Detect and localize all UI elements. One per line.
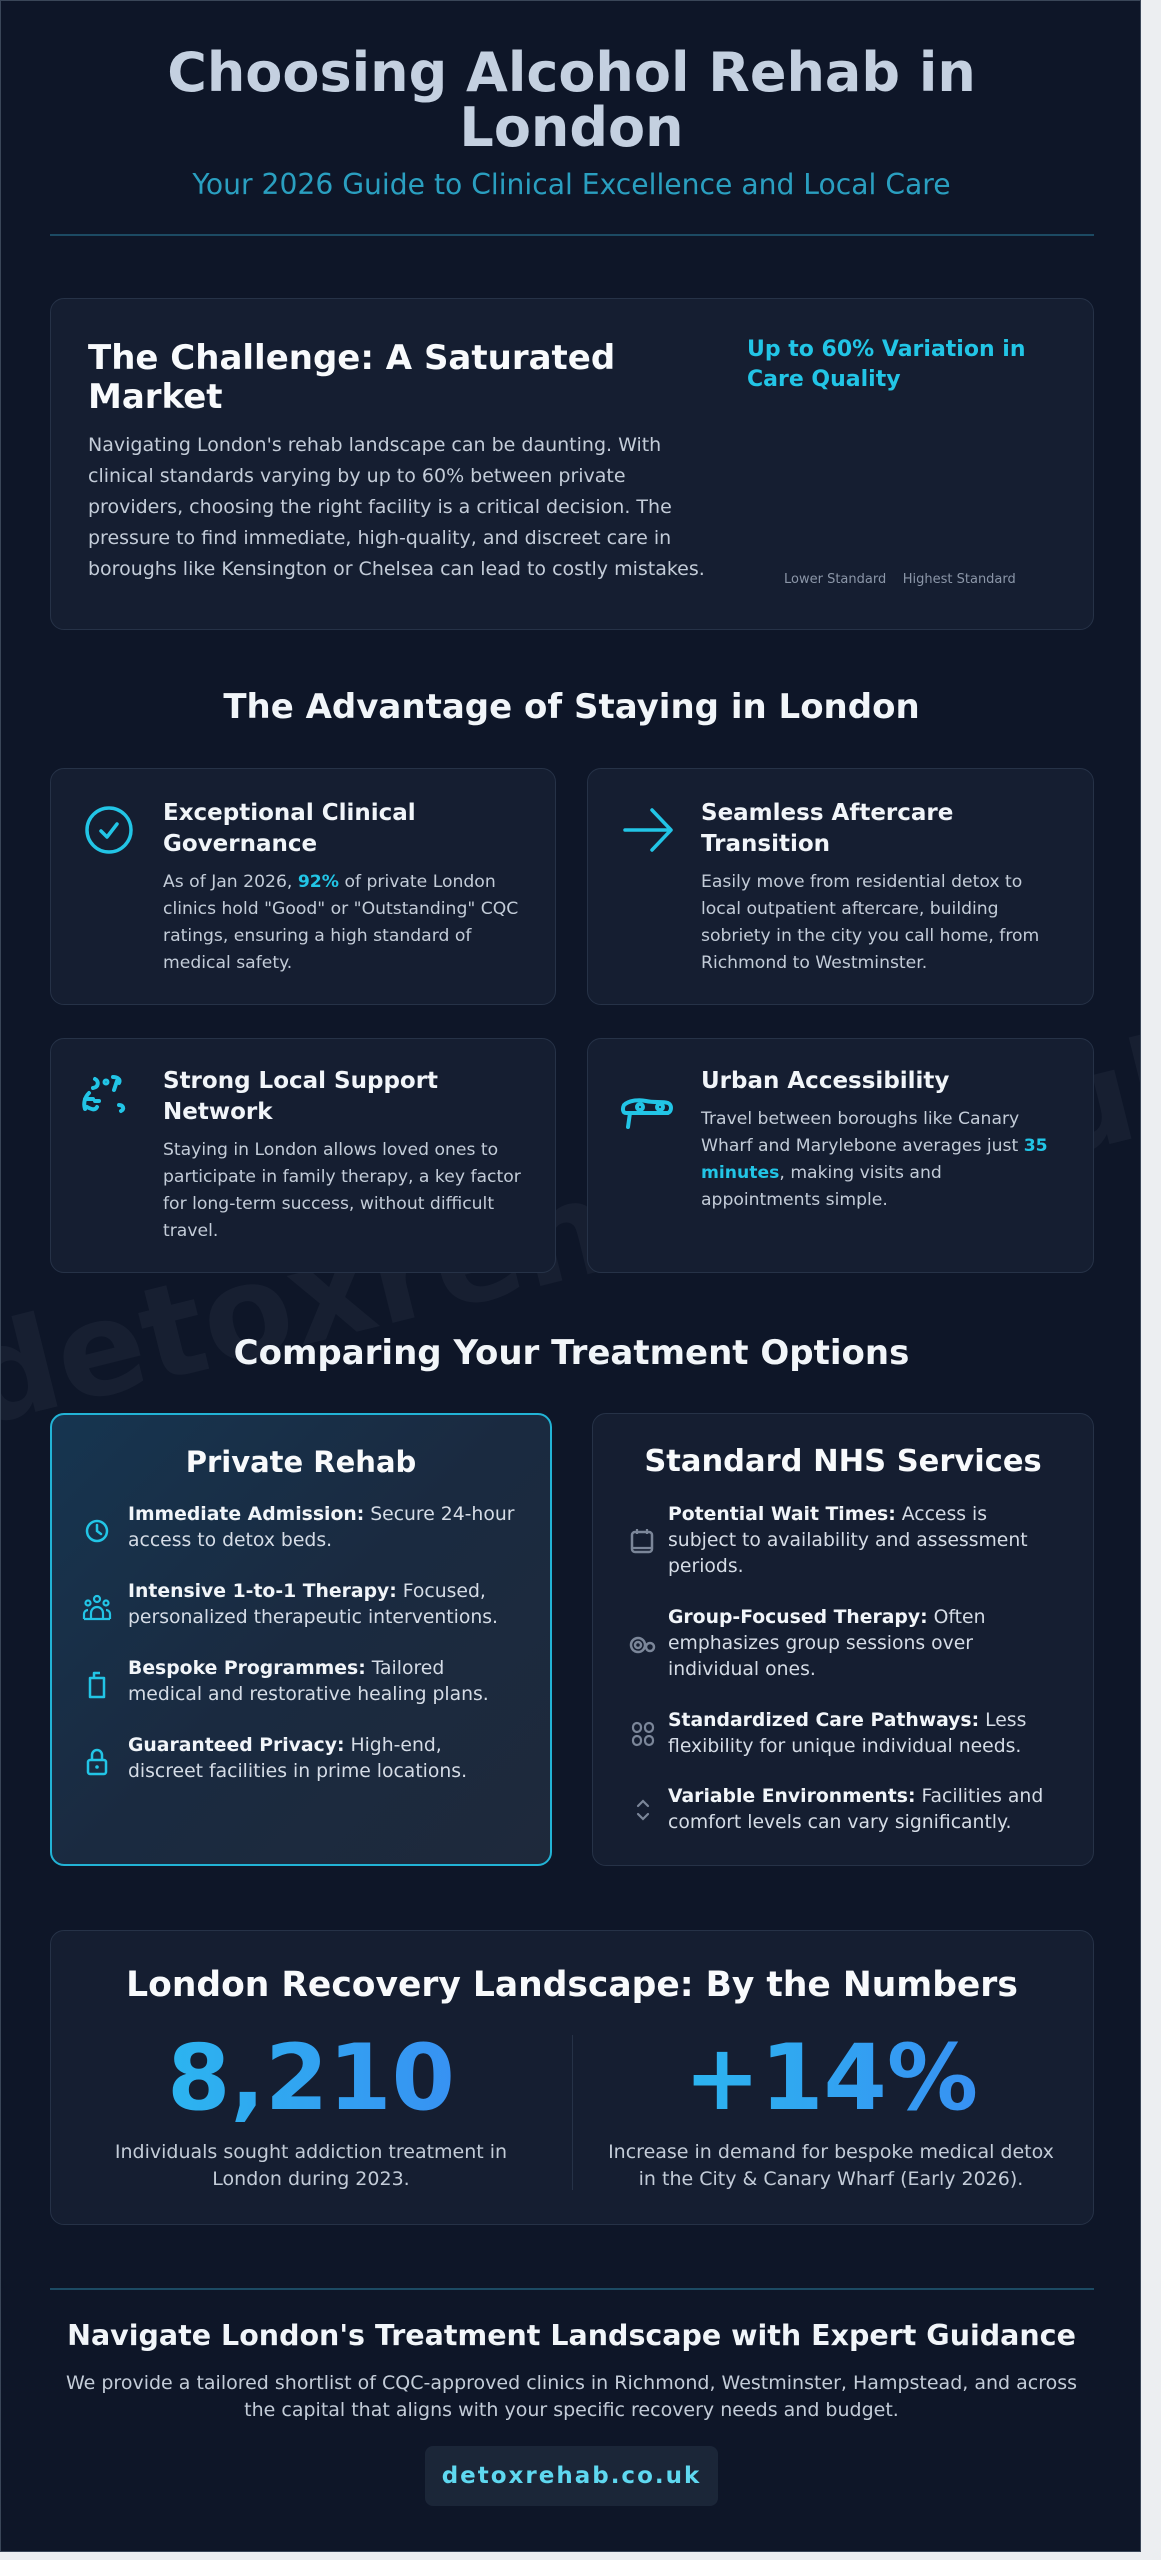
chart: care quality variation bbox=[747, 337, 1025, 587]
panel: challenge bbox=[50, 298, 1094, 630]
footer text bbox=[66, 2372, 1077, 2421]
item: therapy: Intensive 1-to-1 Therapy: Focused, bbox=[128, 1581, 486, 1602]
item: admission: access to detox beds. bbox=[128, 1530, 332, 1551]
challenge text: clinical standards varying by up to 60% between private bbox=[88, 465, 626, 487]
item: programmes: medical and restorative healing plans. bbox=[128, 1684, 489, 1705]
item: privacy: Guaranteed Privacy: High-end, bbox=[128, 1735, 442, 1756]
panel: support network: participate in family therapy, a key factor bbox=[163, 1167, 521, 1187]
item: programmes: Bespoke Programmes: Tailored bbox=[128, 1658, 444, 1679]
challenge text: pressure to find immediate, high-quality, and discreet care in bbox=[88, 527, 671, 549]
panel: aftercare: Richmond to Westminster. bbox=[701, 953, 927, 973]
stat: 8,210: London during 2023. bbox=[212, 2168, 410, 2190]
stat: +14%: in the City & Canary Wharf (Early 2026). bbox=[639, 2168, 1023, 2190]
subtitle: Your 2026 Guide to Clinical Excellence and Local Care bbox=[192, 168, 951, 201]
panel: aftercare: Transition bbox=[701, 831, 830, 857]
challenge heading: Market bbox=[88, 377, 223, 417]
footer text: the capital that aligns with your specific recovery needs and budget. bbox=[244, 2399, 899, 2421]
challenge text: providers, choosing the right facility is a critical decision. The bbox=[88, 496, 672, 518]
item: environments: comfort levels can vary significantly. bbox=[668, 1812, 1011, 1833]
challenge text: Navigating London's rehab landscape can be daunting. With bbox=[88, 434, 661, 456]
challenge heading: The Challenge: A Saturated bbox=[88, 338, 615, 378]
panel: clinical governance: Governance bbox=[163, 831, 317, 857]
stat: 8,210: 8,210 bbox=[167, 2026, 455, 2131]
item: wait times: periods. bbox=[668, 1556, 744, 1577]
button: website: detoxrehab.co.uk bbox=[442, 2463, 701, 2489]
panel: aftercare: local outpatient aftercare, building bbox=[701, 899, 999, 919]
panel: urban accessibility: Wharf and Marylebone averages just 35 bbox=[701, 1136, 1048, 1156]
panel: by the numbers bbox=[50, 1930, 1094, 2225]
button: website bbox=[425, 2446, 718, 2506]
stat: +14% bbox=[608, 2026, 1054, 2190]
panel: aftercare: Easily move from residential detox to bbox=[701, 872, 1022, 892]
item: programmes bbox=[88, 1658, 489, 1705]
panel: clinical governance: ratings, ensuring a high standard of bbox=[163, 926, 471, 946]
item: group therapy: individual ones. bbox=[668, 1659, 816, 1680]
footer text: We provide a tailored shortlist of CQC-approved clinics in Richmond, Westminster, Hampstead, and across bbox=[66, 2372, 1077, 2394]
icon: check circle bbox=[85, 806, 133, 854]
challenge text: boroughs like Kensington or Chelsea can lead to costly mistakes. bbox=[88, 558, 705, 580]
item: pathways: Standardized Care Pathways: Less bbox=[668, 1710, 1026, 1731]
heading: advantage: The Advantage of Staying in London bbox=[223, 687, 920, 727]
heading: comparing: Comparing Your Treatment Options bbox=[234, 1333, 909, 1373]
panel: NHS services bbox=[592, 1413, 1094, 1866]
item: group therapy bbox=[630, 1607, 985, 1680]
panel: support network: for long-term success, without difficult bbox=[163, 1194, 494, 1214]
challenge text bbox=[88, 434, 705, 580]
item: pathways: flexibility for unique individual needs. bbox=[668, 1736, 1021, 1757]
icon: arrow bbox=[623, 808, 673, 852]
item: admission bbox=[86, 1504, 514, 1551]
item: environments: Variable Environments: Facilities and bbox=[668, 1786, 1043, 1807]
item: environments bbox=[636, 1786, 1043, 1833]
chart: care quality variation: Lower Standard Highest Standard bbox=[784, 572, 1016, 587]
panel: private rehab bbox=[50, 1413, 552, 1866]
chart: care quality variation: Up to 60% Variation in bbox=[747, 337, 1025, 362]
panel: support network bbox=[50, 1038, 556, 1273]
stat: 8,210: Individuals sought addiction treatment in bbox=[115, 2141, 507, 2163]
item: admission: Immediate Admission: Secure 24-hour bbox=[128, 1504, 514, 1525]
item: group therapy: Group-Focused Therapy: Often bbox=[668, 1607, 985, 1628]
item: privacy: discreet facilities in prime locations. bbox=[128, 1761, 467, 1782]
stat: +14%: +14% bbox=[684, 2026, 978, 2131]
panel: support network: Staying in London allows loved ones to bbox=[163, 1140, 498, 1160]
footer heading: Navigate London's Treatment Landscape with Expert Guidance bbox=[67, 2319, 1076, 2352]
panel: support network: Network bbox=[163, 1099, 273, 1125]
chart: care quality variation: Care Quality bbox=[747, 367, 901, 392]
panel: clinical governance bbox=[50, 768, 556, 1005]
panel: urban accessibility: appointments simple. bbox=[701, 1190, 888, 1210]
panel: urban accessibility bbox=[587, 1038, 1094, 1273]
panel: clinical governance: Exceptional Clinical bbox=[163, 800, 416, 826]
panel: clinical governance: clinics hold "Good" or "Outstanding" CQC bbox=[163, 899, 518, 919]
title: London bbox=[459, 96, 684, 159]
panel: aftercare bbox=[587, 768, 1094, 1005]
icon: car bbox=[620, 1098, 673, 1129]
panel: urban accessibility: Urban Accessibility bbox=[701, 1068, 949, 1094]
item: wait times: Potential Wait Times: Access is bbox=[668, 1504, 987, 1525]
panel: support network: travel. bbox=[163, 1221, 218, 1241]
panel: urban accessibility: minutes, making visits and bbox=[701, 1163, 942, 1183]
panel: clinical governance: As of Jan 2026, 92% of private London bbox=[163, 872, 496, 892]
stat: +14%: Increase in demand for bespoke medical detox bbox=[608, 2141, 1054, 2163]
title: Choosing Alcohol Rehab in bbox=[167, 41, 976, 104]
NHS heading: Standard NHS Services bbox=[644, 1444, 1042, 1479]
icon: support bbox=[82, 1075, 126, 1114]
stat: 8,210 bbox=[115, 2026, 507, 2190]
panel: aftercare: sobriety in the city you call home, from bbox=[701, 926, 1039, 946]
title bbox=[167, 41, 976, 159]
item: therapy bbox=[82, 1581, 498, 1628]
item: wait times: subject to availability and assessment bbox=[668, 1530, 1028, 1551]
numbers heading: London Recovery Landscape: By the Numbers bbox=[126, 1965, 1018, 2005]
panel: clinical governance: medical safety. bbox=[163, 953, 292, 973]
private heading: Private Rehab bbox=[186, 1445, 416, 1479]
panel: urban accessibility: Travel between boroughs like Canary bbox=[701, 1109, 1019, 1129]
item: privacy bbox=[86, 1735, 467, 1782]
challenge heading bbox=[88, 338, 615, 417]
panel: support network: Strong Local Support bbox=[163, 1068, 438, 1094]
item: therapy: personalized therapeutic interventions. bbox=[128, 1607, 498, 1628]
panel: aftercare: Seamless Aftercare bbox=[701, 800, 953, 826]
item: wait times bbox=[630, 1504, 1028, 1577]
item: group therapy: emphasizes group sessions over bbox=[668, 1633, 973, 1654]
item: pathways bbox=[632, 1710, 1026, 1757]
